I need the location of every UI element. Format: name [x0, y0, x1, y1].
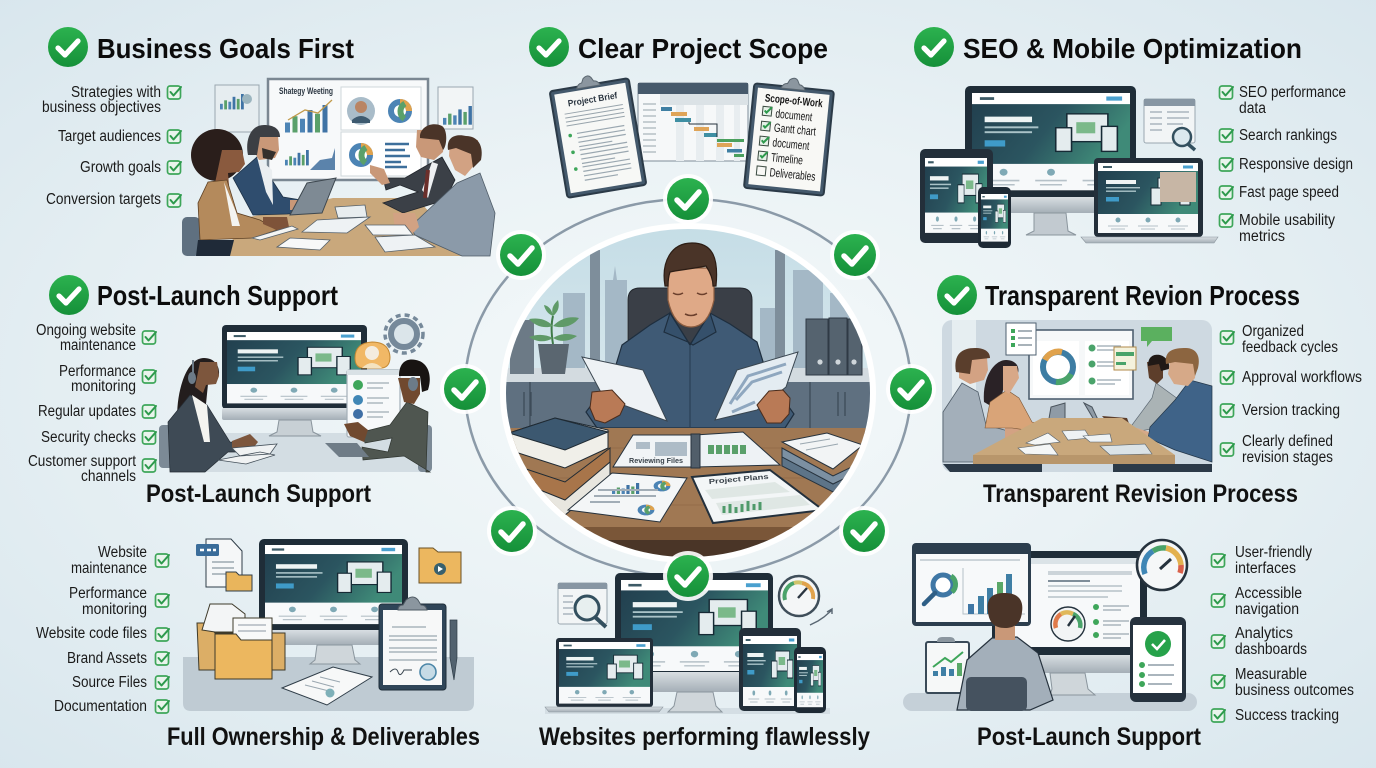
clipboard: scope of work: Timeline [770, 150, 804, 167]
floor [183, 657, 474, 711]
woman [182, 129, 289, 256]
checklist: Source Files [72, 674, 147, 691]
clipboard: scope of work: Scope-of-Work [764, 92, 824, 110]
central illustration: man reviewing documents: Reviewing Files [629, 458, 683, 465]
checklist: data [1239, 100, 1266, 117]
white frame of central scene [500, 223, 876, 563]
checklist [28, 322, 156, 485]
central illustration: man reviewing documents [500, 225, 876, 565]
browser with magnifier [558, 583, 607, 627]
checklist: Strategies with [71, 84, 161, 101]
heading: SEO & Mobile Optimization [963, 33, 1302, 64]
panel: transparent revision process [937, 275, 1362, 508]
checklist: Target audiences [58, 128, 161, 145]
checklist: Growth goals [80, 159, 161, 176]
clipboard: scope of work: Deliverables [769, 165, 816, 184]
checklist: Responsive design [1239, 156, 1353, 173]
clipboard: project brief: Project Brief [567, 90, 619, 108]
right men [1102, 355, 1178, 433]
left man [943, 348, 1023, 462]
room [942, 320, 1212, 472]
tablet [739, 628, 801, 711]
monitor [222, 325, 367, 436]
checklist: Measurable [1235, 666, 1307, 683]
browser with magnifier [1144, 99, 1195, 150]
panel: websites performing flawlessly [539, 551, 870, 751]
check badges on ring [440, 174, 936, 556]
checklist: Performance [59, 363, 136, 380]
floor [903, 693, 1197, 711]
loose report [568, 473, 687, 522]
gantt chart [638, 83, 748, 161]
checklist: revision stages [1242, 449, 1333, 466]
note [1114, 347, 1136, 370]
pen [450, 620, 457, 680]
clipboard: project brief [548, 69, 646, 198]
left binder [510, 320, 534, 374]
caption: Full Ownership & Deliverables [167, 723, 480, 751]
checklist: Website [98, 544, 147, 561]
checklist: Approval workflows [1242, 369, 1362, 386]
panel: seo and mobile optimization [914, 27, 1353, 248]
table [220, 198, 467, 256]
illustration: device suite [545, 573, 832, 714]
heading [49, 275, 338, 315]
monitor [259, 539, 408, 664]
chair [628, 288, 752, 343]
binders [806, 318, 862, 375]
illustration: responsive devices [920, 86, 1218, 248]
gauge bubble [1137, 540, 1187, 590]
caption: Post-Launch Support [977, 723, 1202, 751]
heading [914, 27, 1302, 67]
checklist: maintenance [71, 560, 147, 577]
checklist: Version tracking [1242, 402, 1340, 419]
heading: Post-Launch Support [97, 280, 338, 311]
paper on floor [282, 667, 372, 705]
gauge [779, 576, 819, 616]
orbit ring [465, 199, 911, 577]
laptop [545, 638, 663, 712]
heading: Clear Project Scope [578, 33, 828, 64]
checklist: Clearly defined [1242, 433, 1333, 450]
checklist: Analytics [1235, 625, 1293, 642]
speech bubble [1141, 327, 1172, 347]
woman [984, 360, 1044, 432]
illustration: review meeting [942, 320, 1212, 472]
checklist: Customer support [28, 453, 137, 470]
checklist [1220, 84, 1353, 245]
checklist [42, 84, 181, 208]
desk [500, 428, 876, 530]
folder top right [419, 548, 461, 583]
clipboard [926, 637, 969, 693]
illustration: strategy meeting: Shategy Weeting [279, 86, 333, 96]
person seen from behind [957, 593, 1053, 711]
heading [937, 275, 1300, 315]
clipboard: scope of work: Gantt chart [773, 120, 817, 139]
checklist: business objectives [42, 99, 161, 116]
checklist: Ongoing website [36, 322, 136, 339]
clipboard: scope of work: document [772, 135, 811, 153]
laptop [290, 178, 336, 215]
checklist: Mobile usability [1239, 212, 1335, 229]
heading [529, 27, 828, 67]
check badge [663, 551, 713, 601]
table [973, 418, 1175, 464]
panel: post-launch support left [28, 275, 432, 508]
laptop [1081, 158, 1218, 243]
clipboard: scope of work: document [775, 107, 813, 124]
panel: post-launch support right [903, 540, 1354, 751]
desktop monitor [965, 86, 1136, 235]
paper stack [782, 433, 863, 492]
checklist: Website code files [36, 625, 147, 642]
panel: full ownership and deliverables [36, 539, 480, 751]
desktop monitor [615, 573, 773, 712]
tablet [920, 149, 993, 243]
panel: business goals first [42, 27, 495, 256]
checklist [1212, 544, 1354, 724]
checklist: monitoring [71, 378, 136, 395]
central illustration: man reviewing documents: Project Plans [709, 474, 769, 486]
illustration: support team [159, 315, 432, 472]
checklist: navigation [1235, 601, 1299, 618]
tablet [1130, 617, 1186, 702]
checklist: interfaces [1235, 560, 1296, 577]
support document [347, 370, 400, 437]
checklist: feedback cycles [1242, 339, 1338, 356]
heading: Business Goals First [97, 33, 354, 64]
heading [48, 27, 354, 67]
checklist: User-friendly [1235, 544, 1312, 561]
held documents and hands [582, 352, 798, 423]
centre monitor [992, 551, 1147, 695]
checklist: channels [81, 468, 136, 485]
checklist: Accessible [1235, 585, 1302, 602]
heading: Transparent Revion Process [985, 280, 1300, 311]
checklist: Search rankings [1239, 127, 1337, 144]
illustration: deliverables [183, 539, 474, 711]
checklist card [1006, 323, 1036, 355]
avatar bubble [355, 342, 390, 368]
gear [385, 315, 423, 353]
man [586, 243, 794, 428]
men on the right [370, 124, 455, 213]
illustration: strategy meeting [182, 79, 495, 256]
plant [529, 300, 579, 374]
caption: Transparent Revision Process [983, 480, 1298, 508]
document with tag [196, 539, 252, 591]
illustration: analytics workstation [903, 540, 1197, 711]
checklist: Organized [1242, 323, 1304, 340]
checklist: Performance [69, 585, 147, 602]
clipboard: scope of work [744, 74, 835, 196]
panel: clear project scope [529, 27, 835, 198]
caption: Post-Launch Support [146, 480, 372, 508]
checklist: Security checks [41, 429, 136, 446]
open binder [613, 432, 780, 468]
bound report [692, 470, 823, 523]
checklist: Fast page speed [1239, 184, 1339, 201]
phone [978, 187, 1011, 248]
checklist: Documentation [54, 698, 147, 715]
checklist: monitoring [82, 601, 147, 618]
support woman right [325, 360, 432, 472]
man in blue jacket [233, 125, 315, 215]
checklist [36, 544, 169, 715]
checklist: metrics [1239, 228, 1285, 245]
central hub: ring, photo and check badges [440, 174, 936, 577]
table papers [252, 205, 435, 252]
checklist: Regular updates [38, 403, 136, 420]
checklist: business outcomes [1235, 682, 1354, 699]
desk [170, 433, 423, 472]
checklist: Success tracking [1235, 707, 1339, 724]
table docs [1018, 430, 1152, 455]
caption: Websites performing flawlessly [539, 723, 870, 751]
support woman left [159, 358, 277, 472]
book stack [509, 418, 610, 515]
phone [794, 647, 826, 713]
checklist: Conversion targets [46, 191, 161, 208]
checklist: SEO performance [1239, 84, 1346, 101]
checklist: maintenance [60, 337, 136, 354]
checklist: dashboards [1235, 641, 1307, 658]
left monitor [912, 543, 1031, 626]
folder stack [197, 604, 285, 679]
clipboard [379, 597, 446, 690]
checklist: Brand Assets [67, 650, 147, 667]
screen [1029, 330, 1133, 399]
checklist [1220, 323, 1362, 466]
